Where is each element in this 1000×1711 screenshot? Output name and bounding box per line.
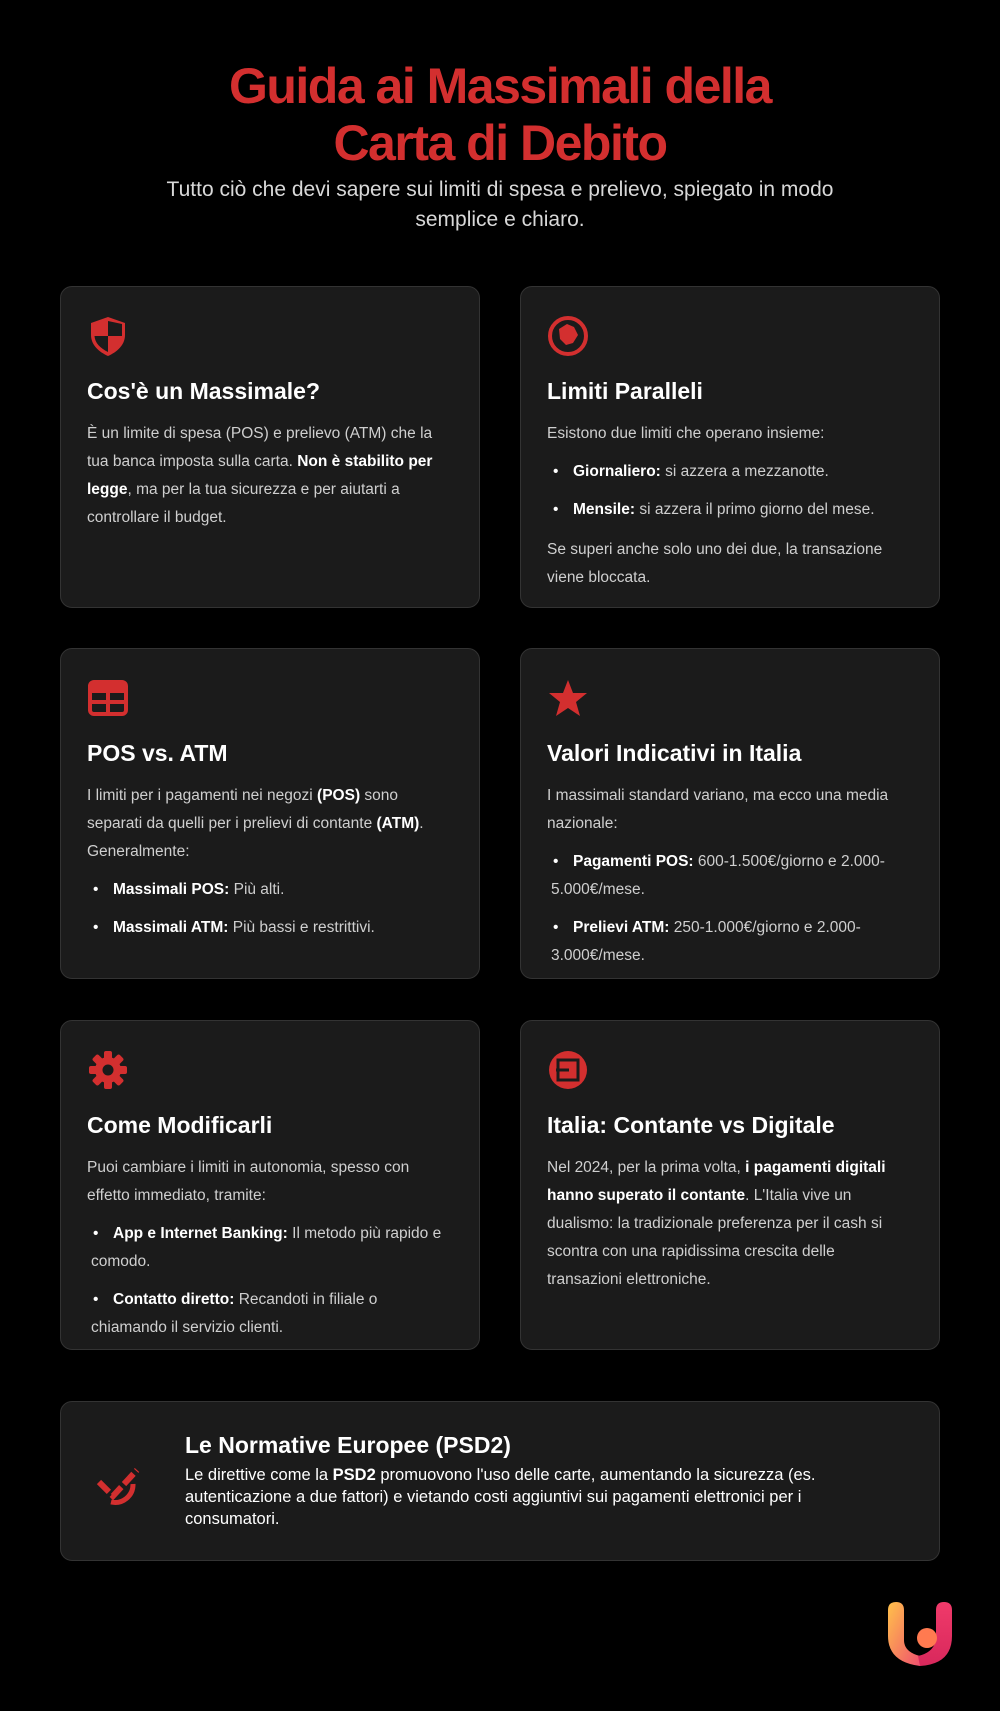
icon: shield <box>91 317 125 356</box>
icon: euro badge <box>549 1051 587 1089</box>
title: Guida ai Massimali della <box>229 58 771 114</box>
panel: pos vs atm: Massimali POS: Più alti. <box>113 881 284 898</box>
panel: limiti paralleli: Se superi anche solo uno dei due, la transazione viene bloccata. <box>547 541 882 586</box>
text: È un limite di spesa (POS) e prelievo (ATM) che la tua banca imposta sulla carta. Non è stabilito per legge, ma per la tua sicurezza e per aiutarti a controllare il budget. <box>87 425 432 526</box>
panel: valori indicativi: Pagamenti POS: 600-1.500€/giorno e 2.000-5.000€/mese. <box>551 853 885 898</box>
panel: valori indicativi: Prelievi ATM: 250-1.000€/giorno e 2.000-3.000€/mese. <box>551 919 861 964</box>
icon: check <box>96 1468 140 1505</box>
heading: POS vs. ATM <box>87 740 228 766</box>
heading: Italia: Contante vs Digitale <box>547 1112 835 1138</box>
heading: Come Modificarli <box>87 1112 272 1138</box>
panel: come modificarli <box>60 1020 480 1350</box>
text: I massimali standard variano, ma ecco una media nazionale: <box>547 787 888 832</box>
panel: italia contante vs digitale <box>520 1020 940 1350</box>
heading: Le Normative Europee (PSD2) <box>185 1432 511 1458</box>
heading: Valori Indicativi in Italia <box>547 740 801 766</box>
panel: limiti paralleli <box>520 286 940 608</box>
text: Le direttive come la PSD2 promuovono l'uso delle carte, aumentando la sicurezza (es. autenticazione a due fattori) e vietando costi aggiuntivi sui pagamenti elettronici per i consumatori. <box>185 1466 816 1528</box>
icon: table <box>88 680 128 716</box>
title <box>229 58 773 171</box>
panel: cos'è un massimale <box>60 286 480 608</box>
panel: come modificarli: App e Internet Banking: Il metodo più rapido e comodo. <box>91 1225 441 1270</box>
heading: Limiti Paralleli <box>547 378 703 404</box>
text: I limiti per i pagamenti nei negozi (POS) sono separati da quelli per i prelievi di contante (ATM). Generalmente: <box>87 787 424 860</box>
heading: Cos'è un Massimale? <box>87 378 320 404</box>
title: Carta di Debito <box>333 115 667 171</box>
panel: come modificarli: Contatto diretto: Recandoti in filiale o chiamando il servizio clienti. <box>91 1291 377 1336</box>
text: Nel 2024, per la prima volta, i pagamenti digitali hanno superato il contante. L'Italia vive un dualismo: la tradizionale preferenza per il cash si scontra con una rapidissima crescita delle transazioni elettroniche. <box>547 1159 886 1288</box>
panel: pos vs atm: Massimali ATM: Più bassi e restrittivi. <box>113 919 375 936</box>
icon: globe <box>548 316 588 356</box>
text: Puoi cambiare i limiti in autonomia, spesso con effetto immediato, tramite: <box>87 1159 409 1204</box>
icon: star <box>549 680 587 716</box>
panel: limiti paralleli: Mensile: si azzera il primo giorno del mese. <box>573 501 875 518</box>
logo <box>888 1602 952 1666</box>
panel: valori indicativi <box>520 648 940 979</box>
panel: limiti paralleli: Giornaliero: si azzera a mezzanotte. <box>573 463 829 480</box>
text: Esistono due limiti che operano insieme: <box>547 425 824 442</box>
panel: normative europee <box>60 1401 940 1561</box>
icon: gear <box>89 1051 127 1089</box>
subtitle: Tutto ciò che devi sapere sui limiti di spesa e prelievo, spiegato in modo semplice e chiaro. <box>167 178 833 231</box>
panel: pos vs atm <box>60 648 480 979</box>
